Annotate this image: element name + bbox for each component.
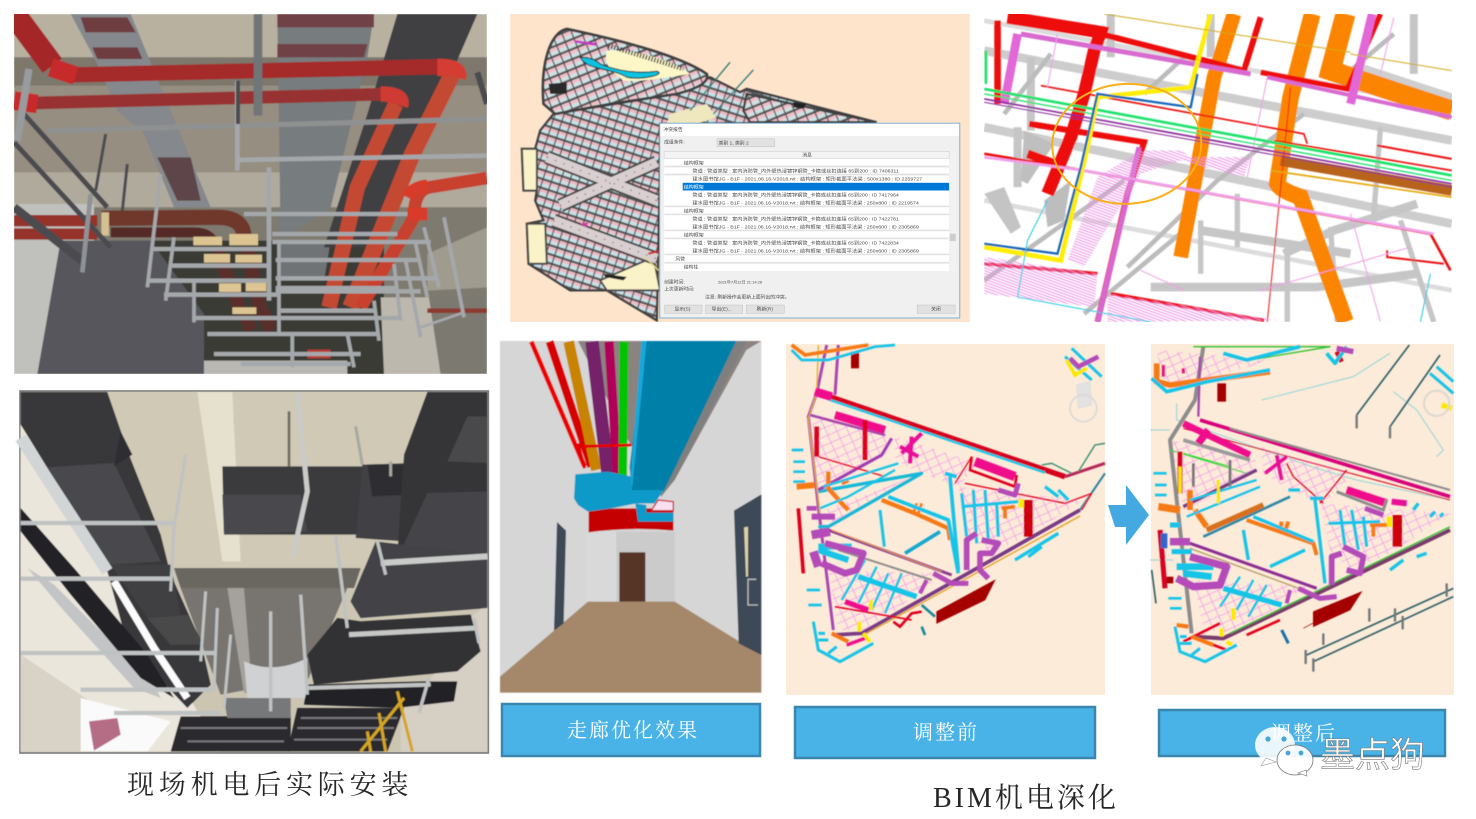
conflict report dialog: 创建时间: <box>664 279 685 286</box>
watermark: WeChat logo and name <box>1255 727 1425 776</box>
photo frame <box>20 391 488 753</box>
ventilation ducts <box>71 14 477 247</box>
report rows: 管道 : 管道类型 : 室内消防管_内外壁热浸镀锌钢管_卡箍或丝扣连接 65到200 : ID 7417964 <box>692 191 899 198</box>
conflict report dialog: 显示(S) <box>674 307 691 313</box>
report rows: 建水图书馆JG - B1F - 2021.06.16-V2018.rvt : 结构框架 : 矩形截面平法梁 : 250x600 : ID 2305869 <box>692 247 919 254</box>
report rows: 结构框架 <box>684 207 704 214</box>
silver conduit and support channels <box>21 393 487 713</box>
thin cyan hanger route <box>1150 353 1450 560</box>
caption: BIM deepening: BIM机电深化 <box>933 782 1119 814</box>
report rows: 建水图书馆JG - B1F - 2021.06.16-V2018.rvt : 结构框架 : 矩形截面平法梁 : 250x800 : ID 2219574 <box>692 199 919 206</box>
conflict report dialog: 成组条件: <box>664 139 685 146</box>
photo: on-site MEP pipes and racks <box>14 14 487 374</box>
thin pink branch mesh <box>812 413 1085 630</box>
report rows: 建水图书馆JG - B1F - 2021.06.16-V2018.rvt : 结构框架 : 矩形截面平法梁 : 500x1380 : ID 2259727 <box>692 175 922 182</box>
report rows: 管道 : 管道类型 : 室内消防管_内外壁热浸镀锌钢管_卡箍或丝扣连接 65到200 : ID 7422834 <box>692 239 899 246</box>
galvanized steel support racks <box>47 81 487 367</box>
yellow fittings <box>859 360 1087 642</box>
orange highlight circle <box>1049 80 1204 208</box>
report rows <box>664 160 949 271</box>
conflict report dialog: 注意: 刷新操作会更新上面列出的冲突。 <box>705 294 790 301</box>
right door <box>734 494 761 655</box>
corridor floor <box>500 602 761 693</box>
caption button: 调整后: 调整后 <box>1271 722 1337 745</box>
cyan ducts <box>1152 347 1453 662</box>
green and purple pipe band <box>984 51 1452 187</box>
report rows: 管道 : 管道类型 : 室内消防管_内外壁热浸镀锌钢管_卡箍或丝扣连接 65到200 : ID 7406311 <box>692 167 899 174</box>
hot pink and red ducts <box>1160 352 1407 650</box>
icon: chat bubbles <box>1255 727 1313 776</box>
report rows: 管道 : 管道类型 : 室内消防管_内外壁热浸镀锌钢管_卡箍或丝扣连接 65到200 : ID 7422781 <box>692 215 899 222</box>
left door <box>554 522 566 631</box>
purple duct clusters <box>807 357 1098 593</box>
conflict report dialog: 冲突报告 <box>663 126 683 133</box>
red ducts <box>984 14 1452 322</box>
conflict report dialog: 关闭 <box>931 306 941 313</box>
caption button: 调整前 <box>795 707 1095 758</box>
panel: corridor optimization model <box>499 340 762 694</box>
conflict report dialog <box>660 123 960 318</box>
purple duct clusters <box>1170 348 1383 603</box>
concrete ceiling background <box>14 14 487 374</box>
conflict report dialog: 刷新(R) <box>757 306 773 313</box>
photo: black insulated ducts on site <box>16 390 490 754</box>
red fire pipes <box>14 14 487 354</box>
arrow: before to after <box>1108 485 1149 545</box>
coloured pipes <box>531 342 631 477</box>
caption button: 走廊优化效果: 走廊优化效果 <box>567 719 699 742</box>
grey structural beams <box>984 14 1452 322</box>
red cross beam <box>589 508 673 532</box>
yellow fittings and blue riser <box>1164 405 1452 645</box>
panel: MEP plan before adjustment <box>786 342 1106 695</box>
top beam <box>525 341 761 497</box>
dark teal hanger lines <box>1152 345 1453 672</box>
dark diagonal channel braces <box>14 14 487 272</box>
conflict report dialog: 2021年7月12日 21:14:26 <box>718 278 763 284</box>
blue duct junction <box>574 472 664 512</box>
yellow and blue pipes <box>984 14 1452 322</box>
report rows: 结构柱 <box>684 264 698 271</box>
orange ducts <box>792 345 1015 642</box>
report rows: 结构框架 <box>684 183 704 190</box>
blue main duct <box>630 341 736 492</box>
report rows: 建水图书馆JG - B1F - 2021.06.16-V2018.rvt : 结构框架 : 矩形截面平法梁 : 250x600 : ID 2305869 <box>692 223 919 230</box>
orange ducts <box>1181 14 1452 322</box>
panel: MEP plan after adjustment <box>1150 344 1455 695</box>
cyan ducts <box>792 345 1102 662</box>
outer red and purple frame <box>808 345 1105 636</box>
insulated brown pipes <box>101 212 271 331</box>
corridor walls <box>500 341 761 693</box>
panel: BIM MEP clash close-up <box>984 14 1452 322</box>
watermark name: 墨点狗 <box>1320 736 1425 775</box>
report rows: 结构框架 <box>684 231 704 238</box>
pink pipe bundles <box>984 14 1452 322</box>
yellow scaffold <box>361 691 412 751</box>
view cube <box>1070 382 1097 422</box>
panel: clash report screenshot <box>510 14 970 322</box>
conflict report dialog: 上次更新时间: <box>664 286 694 293</box>
end door <box>619 552 645 602</box>
view cube <box>1424 391 1449 416</box>
report rows: 结构框架 <box>684 160 704 167</box>
caption button: 调整后 <box>1159 710 1445 756</box>
conflict report dialog: 消息 <box>802 152 812 159</box>
building plan model <box>522 29 877 320</box>
caption button: 调整前: 调整前 <box>913 721 979 744</box>
report rows: 风管 <box>675 255 685 262</box>
caption: on-site installation: 现场机电后实际安装 <box>127 770 413 800</box>
thin pink branch mesh <box>1157 350 1450 633</box>
conflict report dialog: 导出(E)... <box>712 306 732 313</box>
caption button: 走廊优化效果 <box>502 704 760 756</box>
black duct runs <box>21 392 487 751</box>
concrete slab and beams <box>21 392 487 751</box>
conflict report dialog: 类别 1, 类别 2 <box>719 140 749 147</box>
hot pink and red ducts <box>798 352 1028 645</box>
outer frame pipes <box>1170 347 1450 638</box>
orange ducts <box>1157 363 1388 645</box>
